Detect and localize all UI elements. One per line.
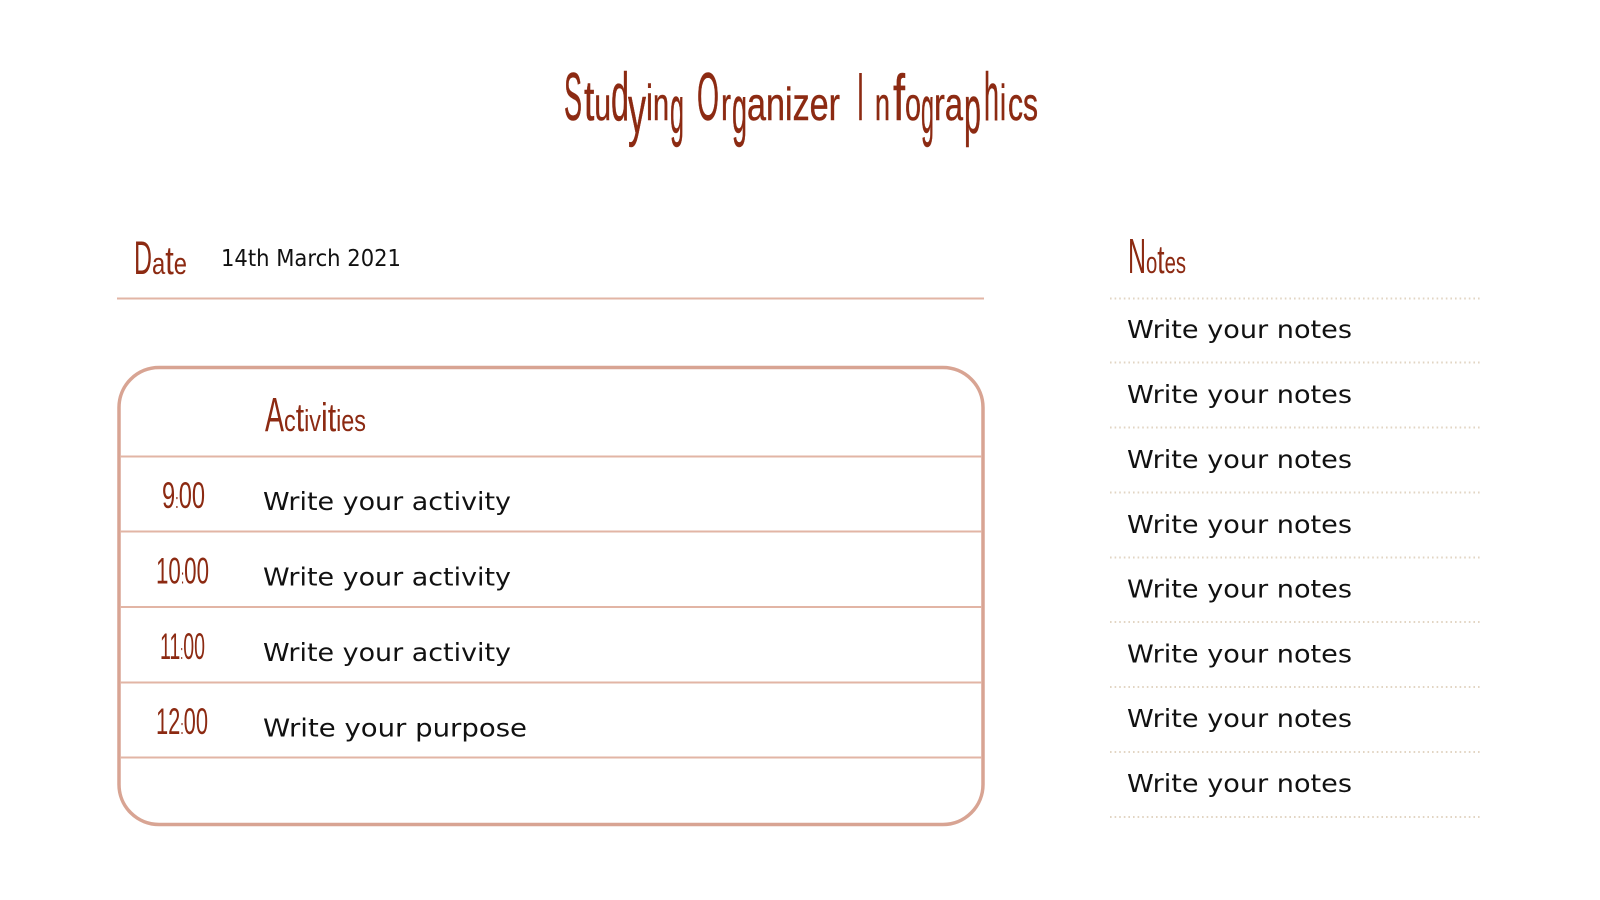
panel border — [119, 368, 983, 824]
title: S — [564, 59, 582, 135]
title: ra — [934, 78, 963, 130]
panel: activities table — [119, 368, 983, 824]
activity 4: Write your purpose — [263, 714, 527, 742]
note 4: Write your notes — [1127, 510, 1352, 539]
title: h — [984, 59, 999, 135]
notes heading — [1128, 230, 1186, 284]
activity 1: Write your activity — [263, 487, 511, 516]
title: cs — [1008, 78, 1038, 130]
date label — [134, 231, 187, 284]
title: i — [1000, 75, 1006, 131]
date row — [117, 231, 984, 298]
note 3: Write your notes — [1127, 445, 1352, 474]
title: f — [893, 61, 906, 134]
date label: D — [134, 231, 152, 284]
title: o — [905, 78, 921, 130]
activities heading — [265, 389, 366, 442]
title: r — [721, 78, 731, 130]
activity 2: Write your activity — [263, 562, 511, 592]
note 7: Write your notes — [1127, 704, 1352, 733]
title: g — [670, 72, 684, 148]
title: y — [628, 72, 646, 148]
title: n — [875, 78, 890, 130]
time: 12:00: 12:00 — [156, 701, 208, 742]
title: tu — [584, 69, 611, 133]
notes heading: N — [1128, 230, 1146, 284]
note 8: Write your notes — [1127, 769, 1352, 798]
activity 3: Write your activity — [263, 638, 511, 667]
note 1: Write your notes — [1127, 315, 1352, 344]
note 5: Write your notes — [1127, 574, 1352, 604]
title: g — [732, 72, 747, 148]
date label: ate — [152, 239, 187, 283]
panel: notes — [1110, 230, 1480, 817]
title: O — [697, 59, 719, 135]
title: anizer — [747, 78, 840, 130]
note 2: Write your notes — [1127, 380, 1352, 409]
title: I — [857, 59, 864, 135]
title — [564, 59, 1038, 148]
activities heading: ctivities — [284, 396, 366, 440]
notes heading: otes — [1146, 238, 1186, 282]
date value: 14th March 2021 — [221, 246, 401, 272]
title: d — [611, 59, 629, 135]
note 6: Write your notes — [1127, 640, 1352, 668]
title: g — [921, 72, 934, 148]
title: in — [646, 75, 669, 131]
time: 11:00: 11:00 — [160, 626, 205, 667]
activities heading: A — [265, 389, 284, 442]
time: 10:00: 10:00 — [156, 550, 209, 592]
title: p — [964, 72, 981, 148]
time: 9:00: 9:00 — [162, 475, 205, 516]
